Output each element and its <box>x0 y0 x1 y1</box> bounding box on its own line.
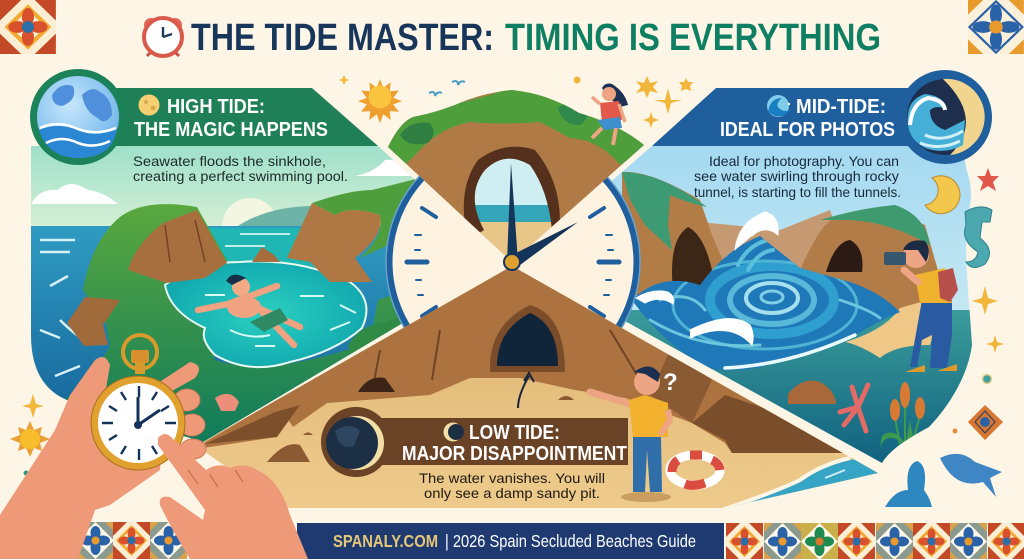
icon: flower tile <box>968 405 1003 440</box>
dial hands <box>504 163 578 270</box>
badge: dark moon <box>321 407 391 477</box>
icons: stars <box>338 75 693 128</box>
swimmer <box>198 275 300 345</box>
icon: small crescent <box>925 176 960 214</box>
text: mid tide description: tunnel, is starting to fill the tunnels. <box>694 184 901 200</box>
panel: top wedge cave <box>388 90 644 256</box>
heading: low tide <box>402 422 627 465</box>
footer bar <box>297 523 724 559</box>
icon: wave <box>767 95 790 117</box>
icon: dolphin <box>940 454 1002 497</box>
figure: photographer <box>884 240 958 372</box>
figure: confused man <box>590 366 678 502</box>
wave crests <box>636 212 855 368</box>
cliffs <box>204 269 842 453</box>
footer text: | 2026 Spain Secluded Beaches Guide <box>445 531 696 551</box>
left cliff <box>128 210 227 283</box>
figure: confused man: ? <box>663 369 678 396</box>
text: high tide description <box>133 153 348 184</box>
text: low tide description: only see a damp sandy pit. <box>424 485 600 501</box>
heading: mid tide: MID-TIDE: <box>796 96 886 118</box>
header band: low tide <box>355 418 628 465</box>
heading: low tide: MAJOR DISAPPOINTMENT <box>402 443 627 465</box>
icon: alarm clock <box>144 18 182 56</box>
footer text <box>333 531 696 551</box>
text: low tide description: The water vanishes. You will <box>419 470 605 486</box>
header ribbon: high tide <box>110 88 378 146</box>
footer tiles left <box>77 522 187 559</box>
icons: birds <box>429 81 465 96</box>
text: mid tide description <box>694 153 901 200</box>
icon: life ring <box>670 455 720 485</box>
text: mid tide description: Ideal for photography. You can <box>709 153 899 169</box>
swirling water <box>632 236 900 370</box>
text: low tide description <box>419 470 605 501</box>
lower left brown rock <box>67 297 120 346</box>
clock face <box>386 135 640 389</box>
bush <box>348 318 402 354</box>
title <box>191 17 881 59</box>
heading: mid tide <box>720 96 895 141</box>
footer tiles right <box>726 523 1024 559</box>
tile: top right <box>968 0 1024 54</box>
figure: girl on hill <box>592 84 628 145</box>
panel: low tide <box>200 262 890 512</box>
cave <box>490 305 565 372</box>
coral <box>840 385 868 431</box>
right cliff <box>287 203 381 282</box>
panel: mid tide <box>612 70 992 463</box>
panel: high tide <box>30 69 416 442</box>
right cliff <box>801 220 938 310</box>
left cliff <box>622 172 722 296</box>
land: green headland and shore <box>65 204 425 445</box>
decorations: left sun and sparkles <box>10 394 50 476</box>
badge: crescent moon and wave <box>898 70 992 164</box>
icon: seal <box>885 461 932 507</box>
icon: crescent <box>444 422 464 442</box>
heading: high tide <box>134 96 328 141</box>
reeds <box>880 382 925 446</box>
stopwatch <box>91 335 185 470</box>
pointing hand <box>158 434 308 559</box>
header ribbon: mid tide <box>652 88 915 146</box>
text: high tide description: Seawater floods the sinkhole, <box>133 153 326 169</box>
heading: mid tide: IDEAL FOR PHOTOS <box>720 119 895 141</box>
pool with swimmer water <box>165 261 366 367</box>
title: TIMING IS EVERYTHING <box>505 17 881 59</box>
grass <box>380 88 650 165</box>
footer text: SPANALY.COM <box>333 531 438 551</box>
heading: low tide: LOW TIDE: <box>469 422 560 444</box>
rocks on sand <box>267 444 310 462</box>
badge: blue moon <box>30 69 126 165</box>
tile: top left <box>0 0 56 54</box>
text: mid tide description: see water swirling through rocky <box>694 168 899 184</box>
arrow into cave <box>518 373 534 408</box>
icon: starfish <box>977 168 999 191</box>
icon: moon coin <box>138 94 160 116</box>
cave opening <box>468 158 552 256</box>
decorations: right sparkles <box>952 286 1004 434</box>
heading: high tide: THE MAGIC HAPPENS <box>134 119 328 141</box>
heading: high tide: HIGH TIDE: <box>167 96 265 118</box>
hand holding stopwatch <box>0 357 206 559</box>
sea corner <box>731 459 878 507</box>
icon: seahorse <box>964 207 992 268</box>
sand patch <box>845 302 932 358</box>
text: high tide description: creating a perfect swimming pool. <box>133 168 348 184</box>
icon: sun <box>358 79 402 123</box>
title: THE TIDE MASTER: <box>191 17 494 59</box>
